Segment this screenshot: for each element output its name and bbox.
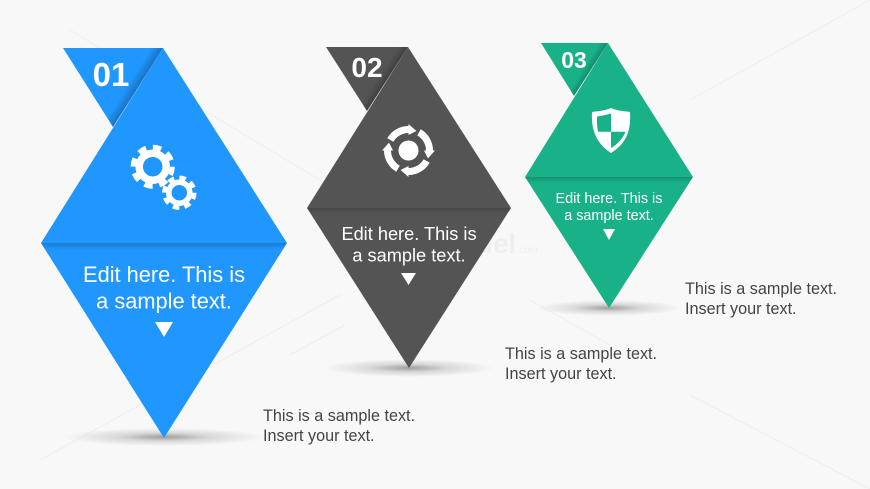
- fold 03: [525, 177, 693, 183]
- marker triangle 02: [401, 273, 416, 285]
- icon: shield: [592, 108, 630, 153]
- description 02: Edit here. This is: [341, 224, 477, 244]
- number 02: 02: [351, 52, 383, 83]
- marker triangle 03: [603, 229, 615, 240]
- diamond body 02: [307, 47, 511, 368]
- panel: step 02: [307, 47, 511, 368]
- shadow: diamond 1: [64, 428, 264, 446]
- fold 02: [307, 208, 511, 214]
- panel: step 01: [41, 48, 287, 438]
- text block: step 01 note: Insert your text.: [263, 427, 375, 445]
- description 03: Edit here. This is: [556, 191, 662, 207]
- fold 01: [41, 243, 287, 250]
- number flag 03: [541, 43, 608, 96]
- description 01: Edit here. This is: [83, 262, 245, 287]
- number 01: 01: [93, 56, 129, 93]
- number 03: 03: [561, 47, 587, 73]
- shadow: diamond 2: [324, 359, 494, 377]
- description 03: a sample text.: [564, 208, 654, 224]
- text block: step 02 note: Insert your text.: [505, 365, 617, 383]
- icon: gears: [133, 147, 194, 208]
- icon: cycle arrows: [382, 124, 435, 177]
- description 01: a sample text.: [96, 288, 232, 314]
- panel: step 03: [525, 43, 693, 308]
- diamond body 01: [41, 48, 287, 438]
- text block: step 01 note: This is a sample text.: [263, 407, 415, 425]
- text block: step 03 note: This is a sample text.: [685, 280, 837, 298]
- description 02: a sample text.: [352, 246, 466, 266]
- text block: step 02 note: This is a sample text.: [505, 345, 657, 363]
- watermark: SlideModel.com: [369, 228, 538, 259]
- text block: step 03 note: Insert your text.: [685, 300, 797, 318]
- marker triangle 01: [155, 322, 173, 337]
- number flag 02: [326, 47, 408, 111]
- number flag 01: [63, 48, 163, 127]
- diamond body 03: [525, 43, 693, 308]
- shadow: diamond 3: [537, 300, 681, 316]
